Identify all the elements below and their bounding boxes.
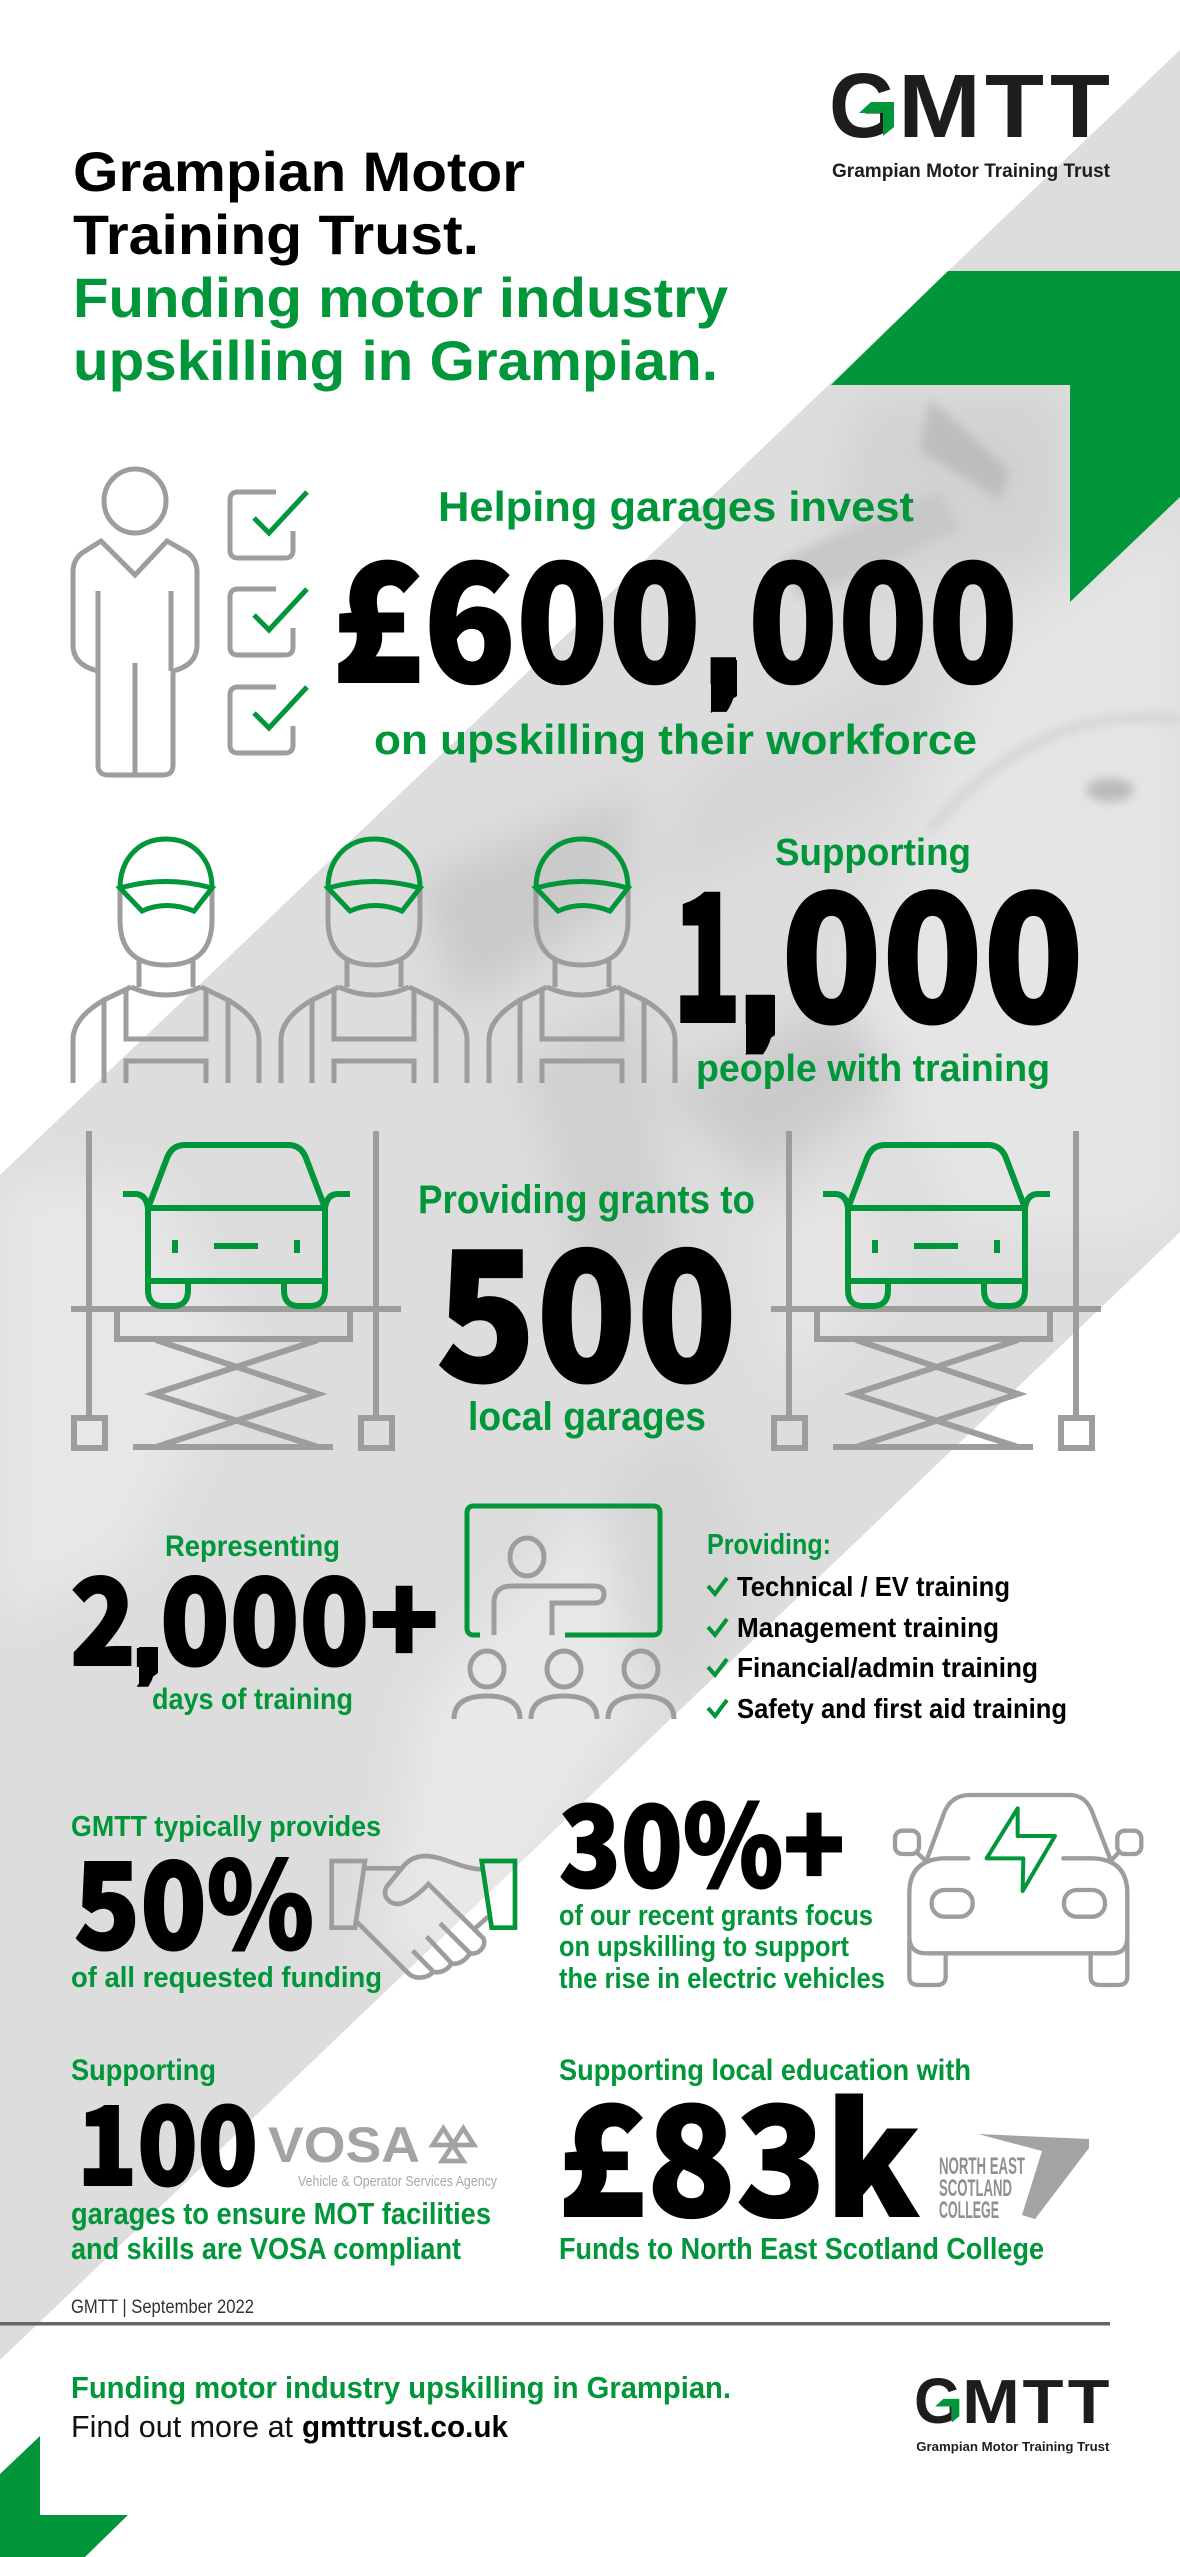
logo: VOSA: VOSA	[268, 2117, 420, 2173]
logo: North East Scotland College: SCOTLAND	[939, 2175, 1012, 2202]
training list: Providing:	[707, 1529, 831, 1561]
footer text: Find out more at	[71, 2409, 293, 2444]
footer text: gmttrust.co.uk	[302, 2409, 509, 2444]
date note: GMTT | September 2022	[71, 2297, 254, 2318]
logo: GMTT top right: G	[829, 55, 897, 157]
stat: £83k: Supporting local education with	[559, 2054, 971, 2087]
icon: car on lift left	[71, 1131, 401, 1448]
logo: GMTT footer: Grampian Motor Training Trust	[916, 2439, 1110, 2454]
stat: 1,000: ,	[732, 847, 786, 1066]
stat: 100 garages: 100	[77, 2060, 258, 2217]
stat: £600,000: Helping garages invest	[438, 483, 914, 530]
icon: electric car	[895, 1795, 1141, 1985]
title: Grampian Motor	[73, 140, 525, 203]
stat: 50%: of all requested funding	[71, 1962, 382, 1994]
stat: £83k: £83k	[557, 2040, 919, 2260]
stat: £83k: Funds to North East Scotland College	[559, 2231, 1044, 2266]
icon: three mechanics	[73, 839, 675, 1083]
logo: GMTT footer: G	[914, 2365, 961, 2437]
logo: GMTT footer: T	[1068, 2367, 1109, 2437]
logo: VOSA	[268, 2117, 497, 2190]
stat: 100 garages: Supporting	[71, 2054, 216, 2087]
green chevron: top right	[831, 271, 1180, 602]
green chevron: bottom left	[0, 2436, 128, 2557]
logo: GMTT top right	[829, 55, 1111, 182]
training list: Safety and first aid training	[737, 1693, 1067, 1724]
stat: 1,000: people with training	[696, 1048, 1050, 1090]
stat: £600,000: 000	[748, 493, 1018, 730]
title	[73, 140, 728, 392]
stat: 50%: GMTT typically provides	[71, 1811, 381, 1843]
stat: 1,000: 000	[781, 817, 1084, 1074]
stat: £600,000: on upskilling their workforce	[374, 716, 977, 763]
title: Training Trust.	[73, 203, 479, 266]
training list: Management training	[737, 1612, 999, 1643]
training list	[707, 1529, 1067, 1724]
logo: North East Scotland College	[939, 2134, 1089, 2224]
icon: mechanic 1	[73, 839, 259, 1083]
stat: 1,000	[672, 817, 1084, 1090]
stat: 500: local garages	[468, 1395, 706, 1439]
logo: GMTT top right: M	[898, 57, 981, 157]
stat: 2,000+: 2	[70, 1526, 136, 1700]
stat: 30%+: on upskilling to support	[559, 1931, 849, 1963]
logo: North East Scotland College: NORTH EAST	[939, 2153, 1025, 2180]
logo: GMTT top right: Grampian Motor Training Trust	[832, 161, 1111, 182]
stat: 30%+: of our recent grants focus	[559, 1900, 873, 1932]
logo: GMTT top right: T	[1050, 57, 1110, 157]
logo: GMTT footer	[914, 2365, 1110, 2454]
icon: mechanic 2	[281, 839, 467, 1083]
stat: £600,000: £600	[331, 493, 701, 730]
stat: 100 garages: and skills are VOSA compliant	[71, 2231, 461, 2266]
stat: 100 garages: garages to ensure MOT facilities	[71, 2196, 491, 2231]
icon: classroom trainer	[454, 1506, 674, 1719]
stat: 30%+: 30%+	[559, 1756, 845, 1920]
stat: £600,000	[331, 483, 1018, 763]
stat: 500: Providing grants to	[418, 1178, 755, 1222]
training list: Financial/admin training	[737, 1652, 1038, 1683]
stat: 2,000+: 000+	[160, 1526, 439, 1700]
title: Funding motor industry	[73, 266, 728, 329]
title: upskilling in Grampian.	[73, 329, 718, 392]
stat: 2,000+: Representing	[165, 1530, 340, 1563]
stat: 2,000+: ,	[128, 1552, 163, 1694]
training list: Technical / EV training	[737, 1571, 1010, 1602]
icon: mechanic 3	[489, 839, 675, 1083]
logo: GMTT footer: M	[962, 2367, 1020, 2437]
footer text: Funding motor industry upskilling in Grampian.	[71, 2370, 731, 2405]
stat: 500: 500	[436, 1172, 737, 1433]
stat: £600,000: ,	[698, 522, 748, 723]
stat: 30%+: the rise in electric vehicles	[559, 1963, 885, 1995]
icon: person with checklist	[73, 469, 307, 775]
stat: 30%+	[559, 1756, 885, 1995]
logo: VOSA: Vehicle & Operator Services Agency	[298, 2173, 497, 2190]
stat: 50%: 50%	[74, 1810, 314, 1984]
stat: 2,000+: days of training	[152, 1683, 353, 1716]
stat: 2,000+	[70, 1526, 439, 1716]
icon: car on lift right	[771, 1131, 1101, 1448]
logo: GMTT top right: T	[985, 57, 1044, 157]
footer text	[71, 2370, 731, 2444]
stat: 1,000: Supporting	[775, 832, 971, 874]
stat: 1,000: 1	[672, 817, 742, 1074]
stat: 100 garages	[71, 2054, 491, 2266]
logo: GMTT footer: T	[1023, 2367, 1064, 2437]
logo: North East Scotland College: COLLEGE	[939, 2197, 999, 2224]
icon: handshake	[332, 1856, 515, 1978]
